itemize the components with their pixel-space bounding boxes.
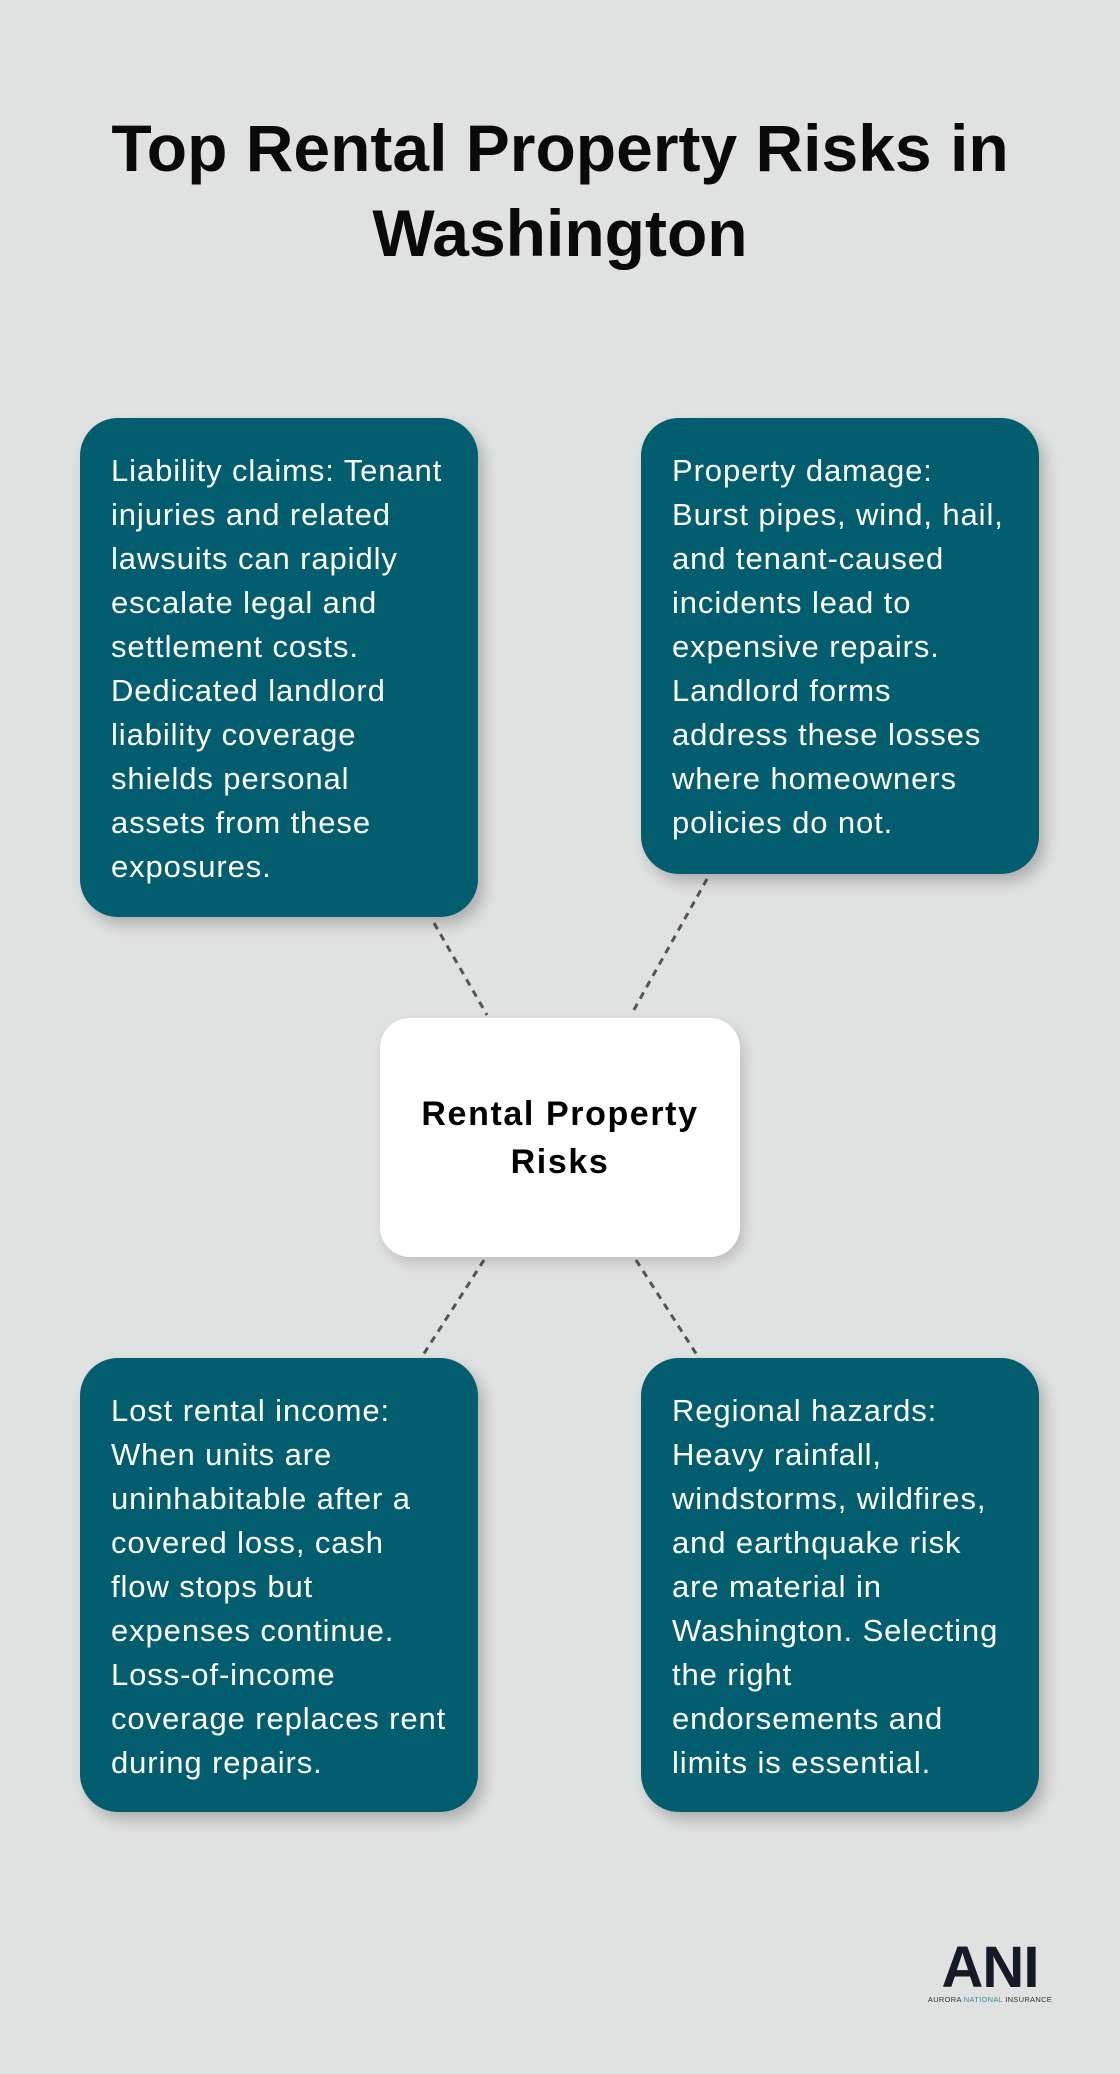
title: Washington	[372, 196, 748, 270]
panel: property damage: policies do not.	[672, 805, 893, 840]
panel: liability claims: assets from these	[111, 805, 371, 840]
title: Top Rental Property Risks in	[111, 111, 1009, 185]
panel: regional hazards: are material in	[672, 1569, 882, 1604]
panel: lost rental income: When units are	[111, 1437, 332, 1472]
panel: lost rental income: uninhabitable after a	[111, 1481, 411, 1516]
center node	[380, 1018, 740, 1257]
panel: liability claims	[80, 418, 478, 917]
panel: liability claims: liability coverage	[111, 717, 356, 752]
panel: regional hazards: Washington. Selecting	[672, 1613, 998, 1648]
panel: lost rental income: flow stops but	[111, 1569, 313, 1604]
panel: lost rental income: covered loss, cash	[111, 1525, 384, 1560]
panel: property damage: Landlord forms	[672, 673, 891, 708]
panel: lost rental income: Loss-of-income	[111, 1657, 336, 1692]
panel: regional hazards: windstorms, wildfires,	[672, 1481, 986, 1516]
panel: lost rental income: coverage replaces rent	[111, 1701, 446, 1736]
panel: lost rental income	[80, 1358, 478, 1812]
panel: regional hazards: and earthquake risk	[672, 1525, 961, 1560]
panel: regional hazards: Heavy rainfall,	[672, 1437, 882, 1472]
center node: Rental Property	[421, 1094, 699, 1132]
panel: property damage	[641, 418, 1039, 874]
panel: regional hazards: limits is essential.	[672, 1745, 931, 1780]
panel: liability claims: Dedicated landlord	[111, 673, 386, 708]
panel: liability claims: shields personal	[111, 761, 349, 796]
panel: liability claims: lawsuits can rapidly	[111, 541, 398, 576]
panel: property damage: expensive repairs.	[672, 629, 940, 664]
panel: liability claims: injuries and related	[111, 497, 391, 532]
center node: Risks	[511, 1142, 609, 1180]
panel: property damage: where homeowners	[672, 761, 957, 796]
panel: regional hazards	[641, 1358, 1039, 1812]
panel: regional hazards: endorsements and	[672, 1701, 943, 1736]
panel: liability claims: escalate legal and	[111, 585, 377, 620]
panel: property damage: Property damage:	[672, 453, 933, 488]
panel: property damage: incidents lead to	[672, 585, 911, 620]
panel: liability claims: settlement costs.	[111, 629, 359, 664]
panel: property damage: Burst pipes, wind, hail,	[672, 497, 1004, 532]
panel: regional hazards: the right	[672, 1657, 792, 1692]
logo: AURORA NATIONAL INSURANCE	[928, 1995, 1052, 2004]
title	[111, 111, 1009, 270]
panel: regional hazards: Regional hazards:	[672, 1393, 937, 1428]
panel: property damage: address these losses	[672, 717, 981, 752]
panel: lost rental income: during repairs.	[111, 1745, 323, 1780]
panel: liability claims: exposures.	[111, 849, 272, 884]
panel: property damage: and tenant-caused	[672, 541, 944, 576]
panel: lost rental income: Lost rental income:	[111, 1393, 390, 1428]
panel: liability claims: Liability claims: Tenant	[111, 453, 442, 488]
panel: lost rental income: expenses continue.	[111, 1613, 394, 1648]
logo: ANI	[942, 1935, 1038, 2000]
